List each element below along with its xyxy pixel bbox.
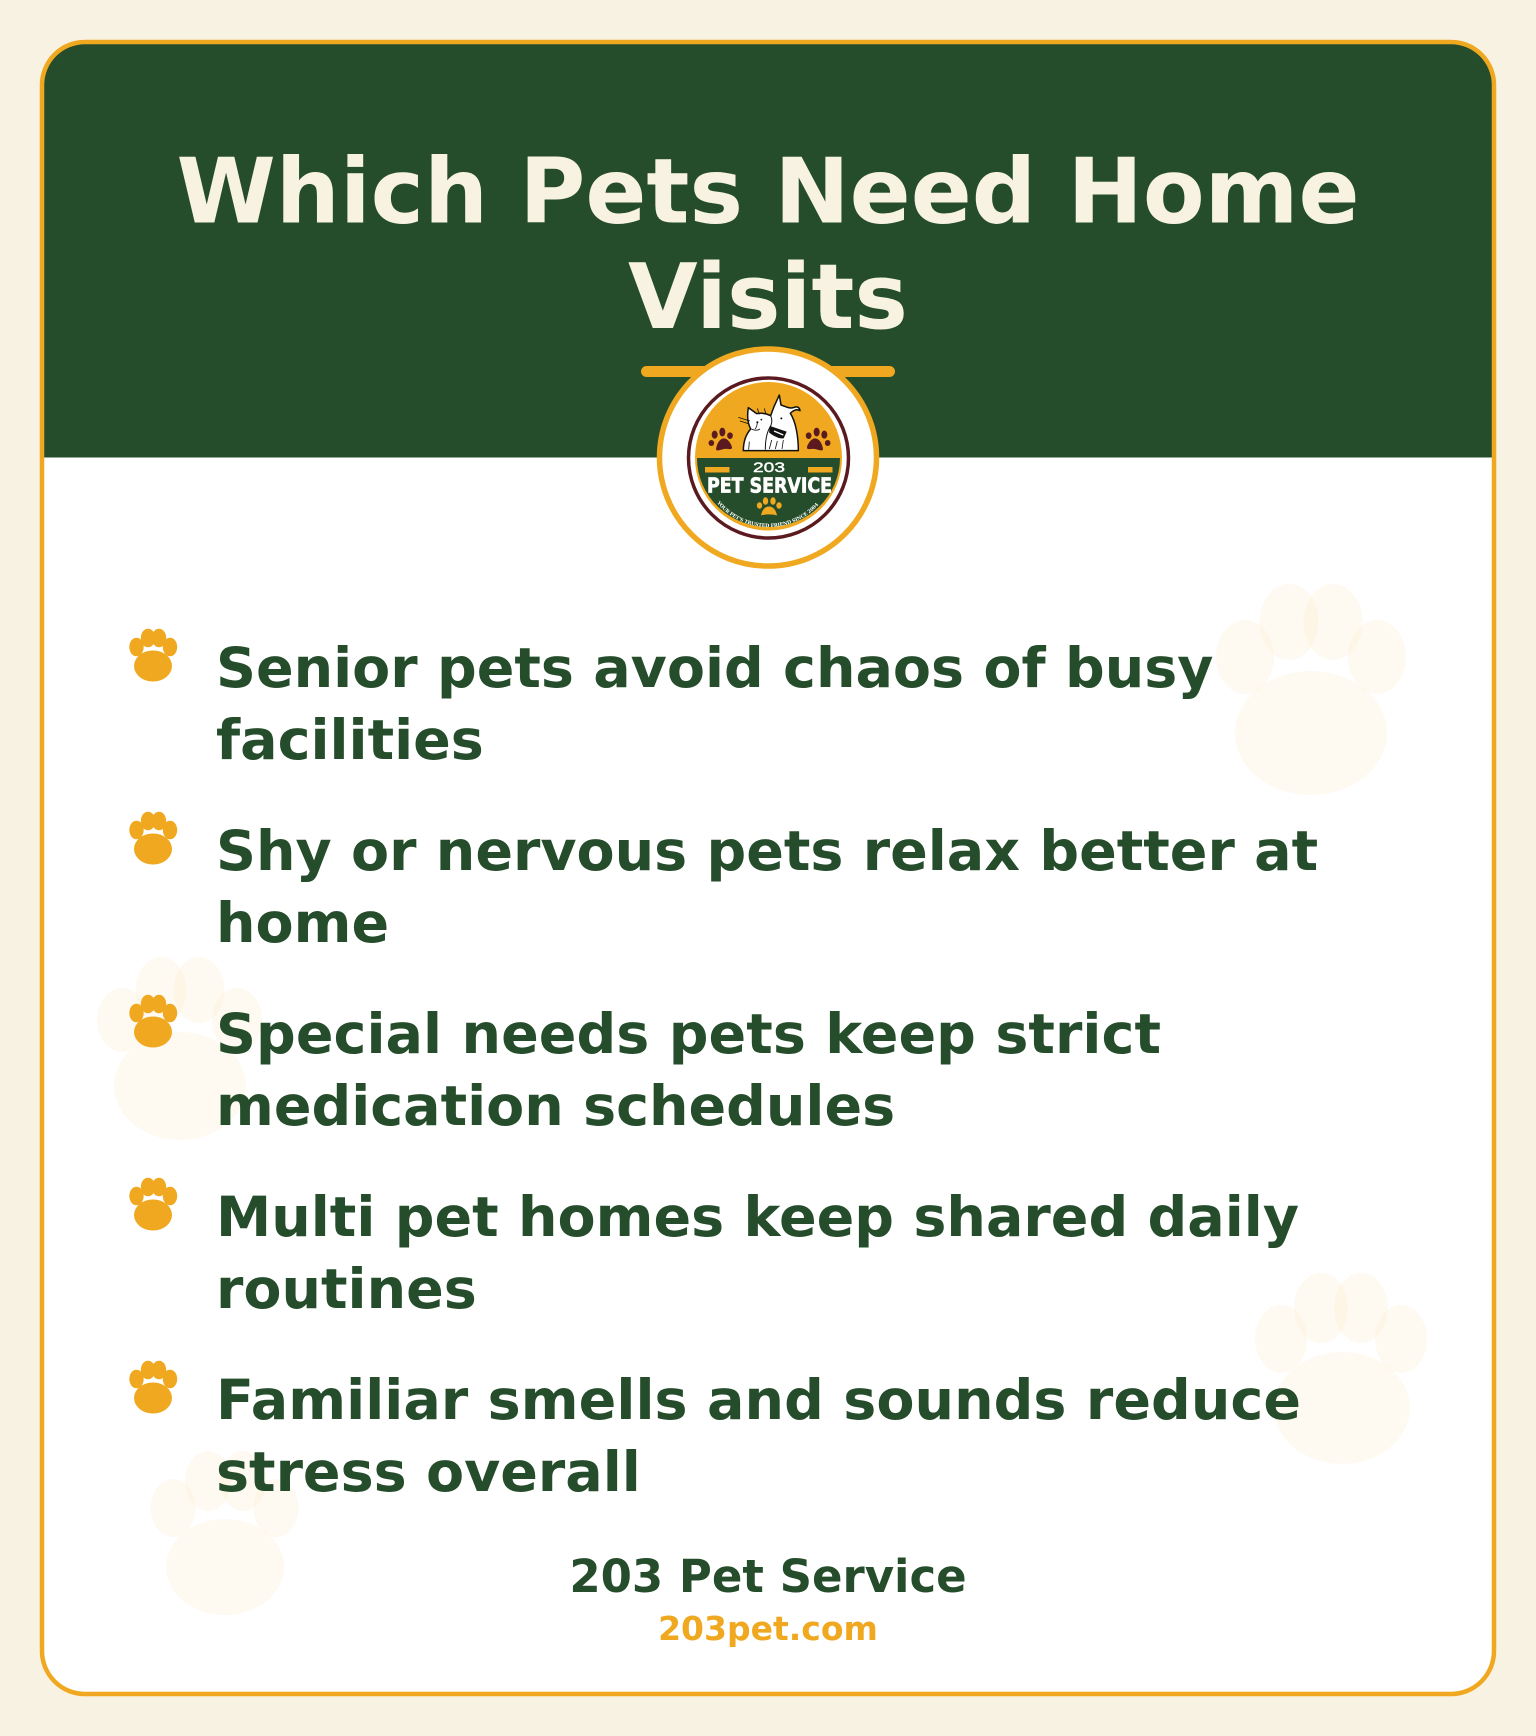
item text	[216, 819, 1318, 956]
title	[176, 140, 1360, 350]
icon: paw bullet	[129, 1178, 177, 1230]
badge circle	[660, 349, 876, 566]
footer: website: 203pet.com	[658, 1609, 878, 1648]
item text: Senior pets avoid chaos of busy	[216, 636, 1213, 701]
item text: stress overall	[216, 1440, 641, 1505]
item text	[216, 636, 1213, 773]
item text: Special needs pets keep strict	[216, 1002, 1161, 1067]
icon: paw bullet	[129, 995, 177, 1048]
icon: small orange paw	[757, 497, 782, 516]
icon: paw bullet	[129, 1361, 177, 1414]
logo badge	[656, 346, 880, 569]
watermark paw: top right	[1216, 584, 1406, 795]
item text	[216, 1368, 1301, 1505]
logo lower field	[697, 458, 840, 527]
item text	[216, 1185, 1299, 1322]
logo text: 203: 203	[753, 459, 785, 475]
title: Visits	[628, 245, 908, 350]
logo upper field	[695, 382, 842, 530]
logo text: pet service: PET SERVICE	[707, 474, 832, 498]
logo bar right	[808, 467, 832, 472]
item text: Multi pet homes keep shared daily	[216, 1185, 1299, 1250]
item text: facilities	[216, 708, 484, 773]
icon: paw bullet	[129, 629, 177, 682]
list item 4	[129, 1178, 1299, 1322]
item text: Shy or nervous pets relax better at	[216, 819, 1318, 884]
logo bar left	[705, 467, 730, 472]
item text: medication schedules	[216, 1074, 895, 1139]
footer: brand name: 203 Pet Service	[569, 1550, 967, 1603]
title underline	[641, 366, 895, 377]
icon: cat and dog	[738, 395, 800, 451]
icon: paw bullet	[129, 812, 177, 864]
list item 3	[129, 995, 1161, 1139]
item text	[216, 1002, 1161, 1139]
watermark paw: bottom left	[150, 1451, 298, 1615]
icon: left maroon paw	[708, 428, 733, 450]
watermark paw: lower right	[1255, 1273, 1427, 1464]
item text: Familiar smells and sounds reduce	[216, 1368, 1301, 1433]
logo ring	[688, 378, 848, 538]
item text: routines	[216, 1257, 477, 1322]
list item 1	[129, 629, 1213, 773]
item text: home	[216, 891, 389, 956]
title: Which Pets Need Home	[176, 140, 1360, 244]
icon: right maroon paw	[806, 428, 830, 450]
watermark paw: middle left	[97, 957, 262, 1140]
logo text: tagline: YOUR PET'S TRUSTED FRIEND SINCE 2004	[718, 500, 818, 528]
list item 2	[129, 812, 1318, 956]
list item 5	[129, 1361, 1301, 1505]
panel: header band	[42, 42, 1494, 458]
